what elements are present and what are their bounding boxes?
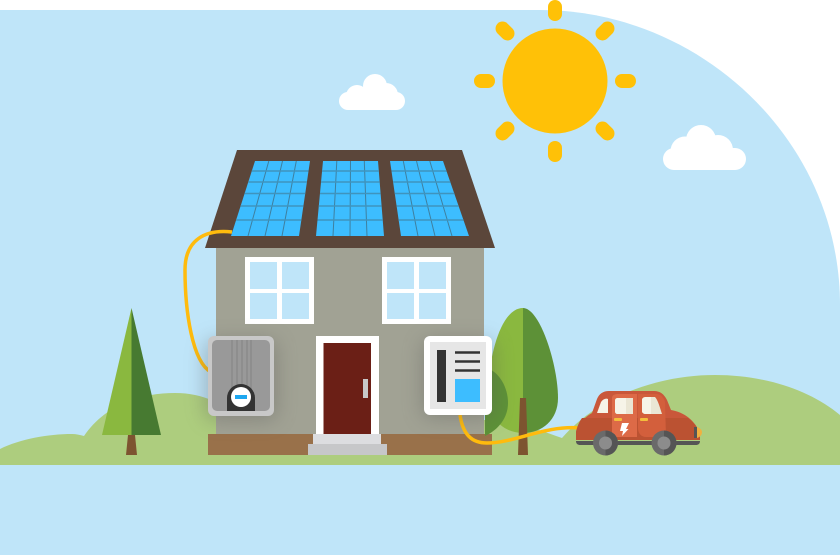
foundation (208, 434, 492, 455)
wire: roof to inverter (185, 232, 232, 372)
window: right (382, 257, 451, 324)
steps (308, 434, 387, 455)
round tree (485, 308, 558, 455)
cloud: small (339, 74, 405, 110)
wire: charger to car (460, 415, 580, 443)
chassis (576, 441, 700, 445)
inverter (205, 336, 277, 420)
solar panel: middle (316, 161, 384, 236)
cloud: large (663, 125, 746, 170)
pine tree (102, 308, 161, 455)
wheel: front (652, 430, 676, 456)
hills (0, 375, 840, 465)
window: left (245, 257, 314, 324)
doors (612, 394, 637, 437)
solar panel: right (390, 161, 469, 236)
sun (474, 0, 636, 162)
meter (227, 384, 255, 411)
house (205, 150, 495, 455)
door (316, 336, 379, 435)
wall (216, 246, 484, 436)
car body (576, 391, 700, 440)
bolt icon (620, 423, 629, 436)
door handles (614, 418, 622, 421)
electric car (576, 391, 702, 456)
car windows (615, 398, 633, 414)
roof (205, 150, 495, 248)
charger panel (422, 336, 494, 418)
bush (485, 367, 508, 436)
headlight (694, 427, 697, 438)
solar panel: left (231, 161, 310, 236)
wheel: rear (593, 430, 618, 456)
